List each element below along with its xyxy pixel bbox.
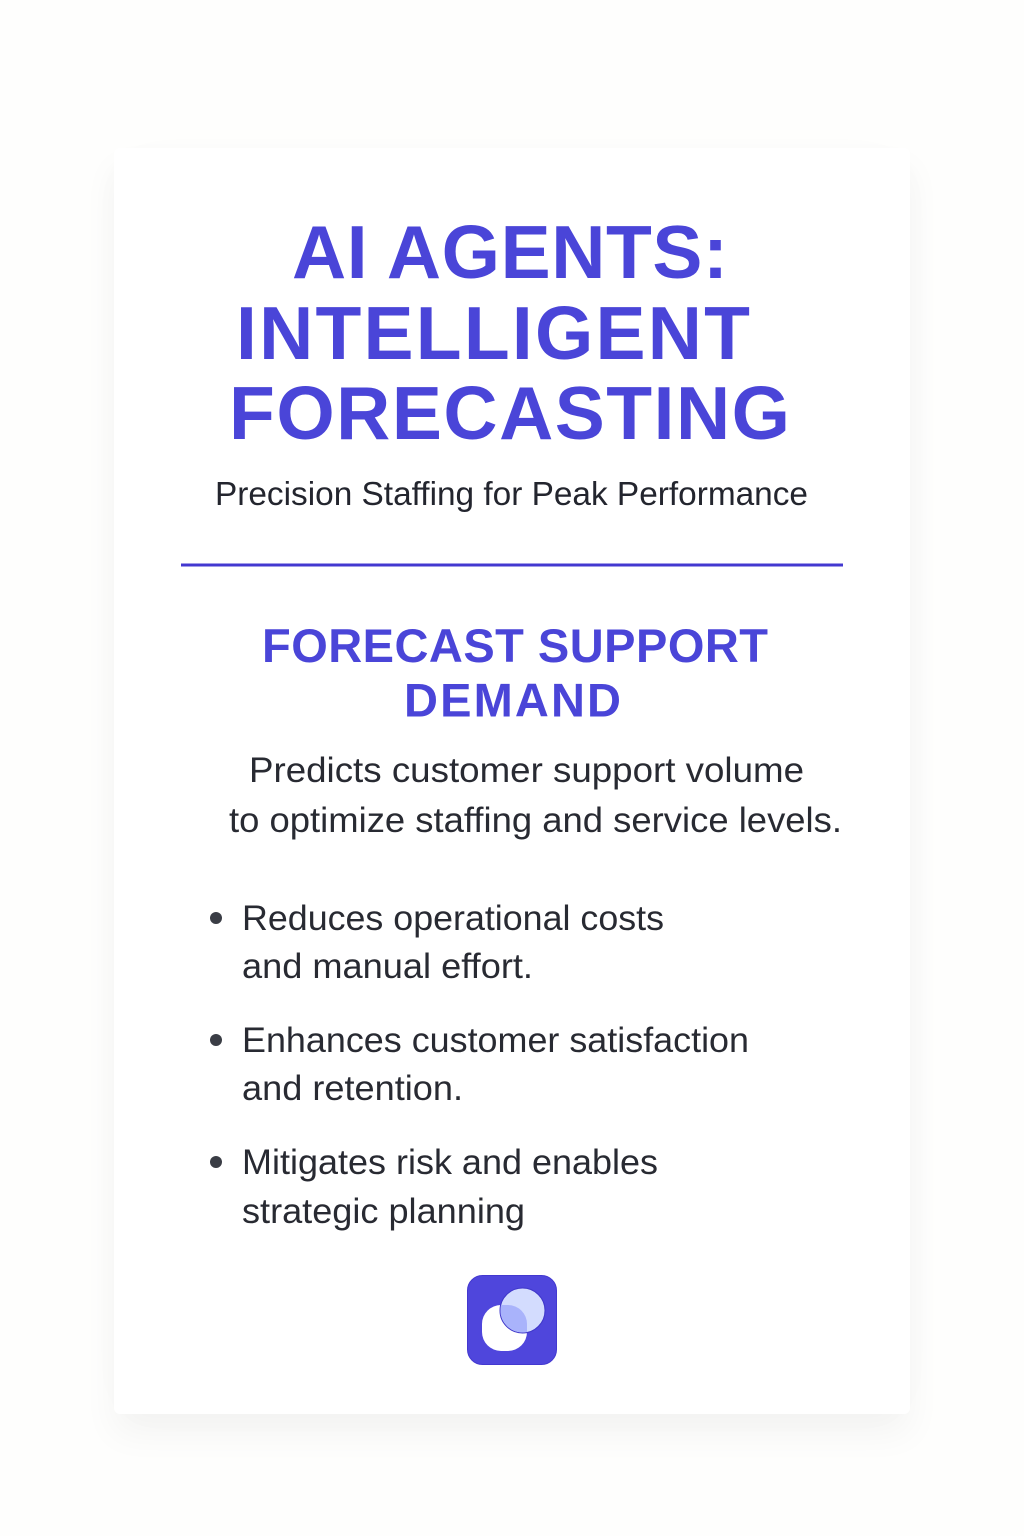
- title: [229, 210, 790, 455]
- bullet: reduces costs: and manual effort.: [242, 947, 533, 986]
- title: INTELLIGENT: [236, 291, 750, 375]
- section heading: [262, 619, 768, 726]
- bullet: enhances satisfaction: and retention.: [242, 1069, 463, 1108]
- description text: to optimize staffing and service levels.: [229, 801, 842, 840]
- bullet: reduces costs: Reduces operational costs: [242, 899, 664, 938]
- description text: [229, 751, 842, 840]
- section heading: DEMAND: [404, 674, 621, 726]
- bullet: reduces costs: [210, 899, 664, 986]
- subtitle: Precision Staffing for Peak Performance: [215, 475, 808, 512]
- title: AI AGENTS:: [292, 210, 728, 294]
- bullet: enhances satisfaction: [210, 1021, 749, 1108]
- bullet: enhances satisfaction: Enhances customer satisfaction: [242, 1021, 749, 1060]
- icon: overlapping circles logo: [468, 1276, 556, 1364]
- description text: Predicts customer support volume: [249, 751, 804, 790]
- bullet: mitigates risk: Mitigates risk and enables: [242, 1143, 658, 1182]
- bullet: mitigates risk: [210, 1143, 658, 1231]
- bullet: mitigates risk: strategic planning: [242, 1192, 525, 1231]
- title: FORECASTING: [229, 371, 790, 455]
- section heading: FORECAST SUPPORT: [262, 619, 768, 672]
- bullet list: [210, 899, 749, 1231]
- panel: main card: [114, 148, 910, 1414]
